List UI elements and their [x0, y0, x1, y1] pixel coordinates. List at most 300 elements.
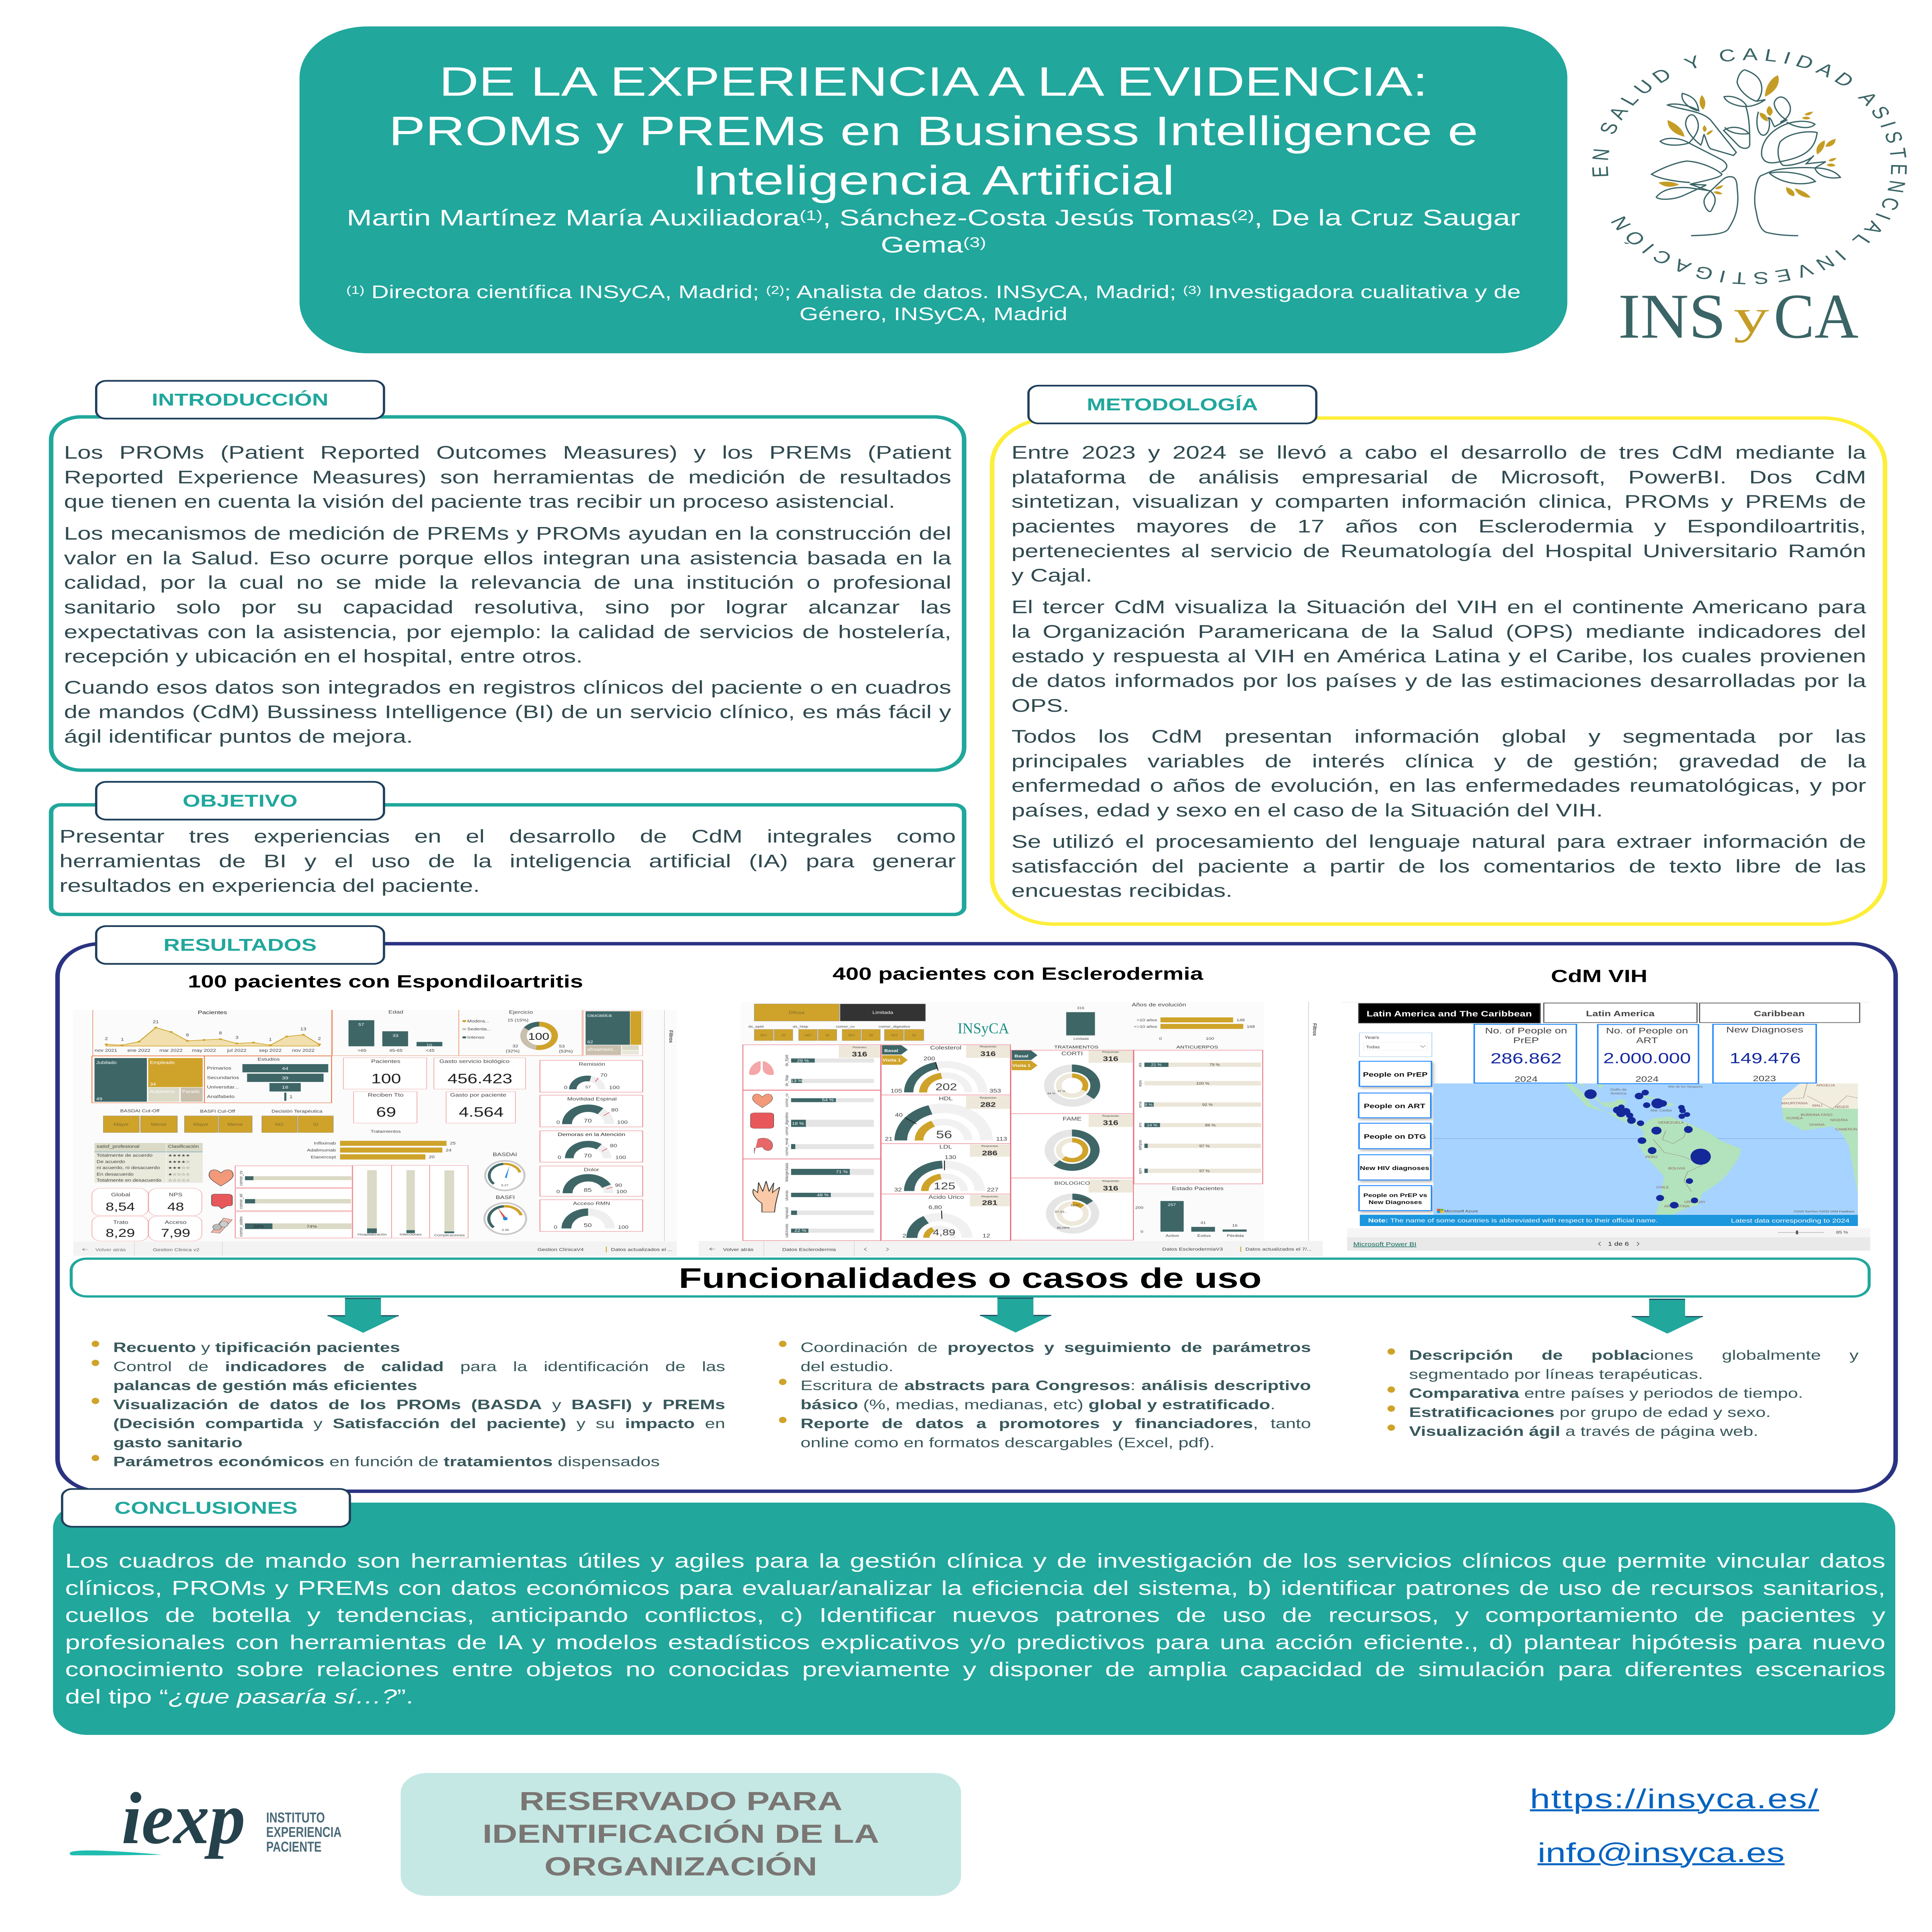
selector buttons [1359, 1061, 1432, 1211]
years slicer [1359, 1033, 1432, 1057]
gauge: remisión: 0 [564, 1085, 568, 1090]
donut: corti: 67 % [1058, 1090, 1066, 1093]
use cases: column 3: Visualización ágil a través de página web. [1409, 1424, 1758, 1439]
subheading: VIH: CdM VIH [1551, 966, 1647, 986]
panel: diagnósticos: 29 % [797, 1058, 809, 1063]
intro paragraph 1 [64, 440, 951, 514]
heading: objetivo: OBJETIVO [183, 791, 298, 810]
gauge: colesterol: 353 [990, 1088, 1001, 1094]
chart: comorbilidades [235, 1166, 352, 1238]
KPI cards: 2024 [1514, 1075, 1537, 1084]
report status bar: Datos actualizados el ... [611, 1247, 672, 1252]
note bar [1360, 1215, 1858, 1226]
gauge: ácido úrico: 4,89 [933, 1228, 955, 1237]
methods paragraph 3 [1012, 724, 1866, 823]
years slicer: Todas [1366, 1044, 1380, 1049]
chart: anticuerpos: 21 % [1151, 1063, 1162, 1067]
chart: estado pacientes: Pérdida [1227, 1234, 1244, 1238]
score cards: Global [111, 1192, 130, 1197]
chart: ejercicio donut: Modera... [467, 1019, 489, 1023]
authors: Martin Martínez María Auxiliadora(1), Sánchez-Costa Jesús Tomas(2), De la Cruz Saugar [347, 205, 1520, 230]
chart: estudios: 16 [282, 1085, 288, 1090]
chart: tratamientos: Tratamientos [371, 1129, 401, 1134]
slicer buttons: Menor [228, 1122, 243, 1127]
gauge: dolor: 85 [584, 1187, 592, 1193]
score cards: Acceso [165, 1219, 187, 1225]
segment buttons: SI [912, 1034, 916, 1037]
chart: comorbilidades: 74% [306, 1224, 317, 1229]
methods paragraph 3: países, edad y sexo en el caso de la Situación del VIH. [1012, 800, 1603, 820]
gauge: demoras [540, 1131, 643, 1172]
map: MAURITANIA [1781, 1102, 1808, 1105]
donut: corti [1011, 1050, 1133, 1114]
gauge: HDL: HDL [939, 1096, 953, 1102]
intro paragraph 3: Cuando esos datos son integrados en registros clínicos del paciente o en cuadros [64, 677, 951, 697]
methods paragraph 1: pertenecientes al servicio de Reumatología del Hospital Universitario Ramón [1012, 541, 1866, 561]
selector buttons: People on ART [1364, 1103, 1425, 1110]
panel: manifestaciones: 71 % [836, 1170, 848, 1174]
report status bar: Gestion Clinica v2 [153, 1247, 199, 1252]
logo wordmark: CA [1774, 281, 1859, 352]
intro paragraph 3 [64, 675, 951, 749]
KPI card labels and values: 100 [371, 1071, 401, 1086]
gauge: HDL: 113 [996, 1136, 1007, 1142]
methods paragraph 2: la Organización Paramericana de la Salud (OPS) mediante indicadores del [1012, 621, 1866, 642]
donut: corti: CORTI [1061, 1051, 1083, 1056]
heading: tratamientos: TRATAMIENTOS [1054, 1044, 1099, 1049]
donut: corti: 64 % [1048, 1092, 1055, 1095]
donut: fame: FAME [1063, 1116, 1082, 1122]
score cards: 8,29 [105, 1227, 135, 1240]
chart: edad: 45-65 [389, 1048, 403, 1053]
gauge: HDL: 56 [936, 1129, 952, 1141]
panel: metodología [990, 416, 1887, 926]
slicer buttons: Mayor [114, 1122, 129, 1127]
report status bar [699, 1241, 1323, 1257]
KPI card labels and values: Gasto servicio biológico [439, 1059, 510, 1064]
map: GUINEA [1786, 1117, 1803, 1120]
chart: eventos: Hospitalización [357, 1233, 387, 1236]
methods paragraph 3: Todos los CdM presentan información global y segmentada por las [1012, 726, 1866, 747]
chart: edad: 10 [426, 1043, 432, 1048]
KPI cards: No. of People on [1606, 1026, 1688, 1036]
KPI card labels and values: 456.423 [447, 1071, 512, 1086]
chart: estudios: Universitar... [207, 1085, 239, 1089]
panel: manifestaciones: raynaud [785, 1208, 789, 1219]
chart: edad: >65 [358, 1048, 367, 1053]
gauge: demoras: 70 [584, 1153, 592, 1159]
reserved box: RESERVADO PARA [519, 1787, 842, 1816]
chart: pacientes line: 21 [153, 1020, 159, 1024]
gauge: ácido úrico: Acido Urico [929, 1195, 964, 1200]
table: satisfacción: ★★★★☆ [168, 1160, 190, 1164]
chart: ejercicio donut: 100 [528, 1032, 549, 1042]
chart: comorbilidades: 26% [253, 1224, 264, 1229]
chart: años de evolución: 148 [1236, 1018, 1245, 1022]
donut: biologico: 316 [1103, 1185, 1118, 1192]
chart: estudios: Estudios [258, 1057, 280, 1061]
KPI cards: 2.000.000 [1603, 1050, 1691, 1066]
segment buttons: dx_htap [793, 1025, 808, 1029]
map: ARGENTINA [1664, 1205, 1690, 1208]
table: satisfacción: ★☆☆☆☆ [168, 1173, 190, 1177]
chart: anticuerpos: ANTICUERPOS [1176, 1044, 1218, 1049]
chart: tratamientos: Etanercept [311, 1155, 336, 1160]
tree [1651, 70, 1840, 236]
panel: manifestaciones: calcinosis [785, 1224, 789, 1238]
text: introducción [64, 440, 951, 753]
arrow: column 2 [980, 1298, 1051, 1333]
donut: corti: Respuestas [1102, 1051, 1119, 1053]
chart: edad: <45 [426, 1048, 435, 1053]
methods paragraph 2 [1012, 595, 1866, 718]
gauge: colesterol: 316 [980, 1050, 996, 1058]
map: CHILE [1656, 1186, 1669, 1189]
region tabs: Latin America [1586, 1009, 1655, 1018]
chart: años de evolución: 0 [1159, 1037, 1162, 1041]
KPI card labels and values: Reciben Tto [368, 1092, 403, 1098]
report status bar: Gestion ClínicaV4 [537, 1247, 584, 1252]
gauge: ácido úrico: Respuestas [981, 1195, 998, 1198]
methods paragraph 3: enfermedad o años de evolución, en las enfermedades reumatológicas, y por [1012, 776, 1866, 796]
chart: ejercicio donut [459, 1010, 582, 1056]
icon: intestine [212, 1194, 232, 1209]
panel: comorbilidades: comor_cv [785, 1094, 789, 1107]
gauge: HDL: 282 [980, 1101, 996, 1109]
chart: anticuerpos: 14 % [1147, 1123, 1158, 1127]
chart: anticuerpos: arpa [1138, 1080, 1143, 1087]
segment buttons: SI [869, 1034, 873, 1037]
treemap: etnia: 62 [587, 1040, 593, 1044]
heading: introducción [95, 380, 385, 420]
chart: eventos: Complicaciones [434, 1234, 465, 1237]
slicer buttons: BASFI Cut-Off [200, 1109, 235, 1114]
gauge: dolor [540, 1166, 643, 1209]
chart: estado pacientes: 16 [1232, 1224, 1238, 1228]
intro paragraph 2: expectativas con la asistencia, por ejemplo: la calidad de servicios de hostelería, [64, 622, 951, 642]
subheading: esclerodermia: 400 pacientes con Esclerodermia [833, 964, 1203, 984]
segment buttons [748, 1004, 925, 1041]
chart: anticuerpos: 86 % [1205, 1123, 1216, 1127]
intro paragraph 3: ágil identificar puntos de mejora. [64, 726, 413, 747]
gauge: remisión: Remisión [579, 1062, 605, 1067]
map: VENEZUELA [1658, 1121, 1684, 1125]
gauge: BASDAI: 5.27 [501, 1184, 509, 1187]
methods paragraph 2: de datos informados por los países y de las estimaciones desarrolladas por la [1012, 670, 1866, 691]
score cards: NPS [169, 1192, 182, 1197]
KPI cards: 2024 [1636, 1075, 1659, 1084]
map: Mar Caribe [1650, 1109, 1672, 1112]
donut: biologico: Respuestas [1102, 1180, 1119, 1182]
heading: resultados [95, 925, 385, 965]
treemap: situación laboral: Parado [182, 1089, 200, 1094]
panel: manifestaciones [743, 1159, 881, 1241]
slicer buttons [104, 1109, 333, 1133]
methods paragraph 4 [1012, 829, 1866, 903]
gauge: dolor: 90 [615, 1183, 622, 1188]
use cases: column 3: Comparativa entre países y periodos de tiempo. [1409, 1386, 1803, 1401]
use cases: column 1: gasto sanitario [113, 1435, 243, 1450]
chart: pacientes line: nov 2021 [95, 1048, 117, 1053]
intro paragraph 1: Reported Experience Measures) son herramientas de medición de resultados [64, 467, 951, 487]
gauge: demoras: 100 [616, 1155, 626, 1160]
use cases: column 1: Parámetros económicos en función de tratamientos dispensados [113, 1454, 660, 1469]
segment buttons: NO [760, 1034, 767, 1037]
chart: estudios [204, 1056, 332, 1103]
KPI cards: ART [1636, 1036, 1658, 1045]
text: metodología [1012, 440, 1866, 903]
gauge: LDL: 32 [894, 1187, 902, 1193]
chart: anticuerpos: 8 % [1145, 1103, 1153, 1107]
chart: pacientes line: Pacientes [198, 1010, 227, 1015]
methods paragraph 1: sintetizan, visualizan y comparten información clinica, PROMs y PREMs de [1012, 492, 1866, 512]
logo ring text: EN SALUD Y CALIDAD ASISTENCIAL INVESTIGACIÓN [1588, 45, 1912, 288]
intro paragraph 3: de mandos (CdM) Bussiness Intelligence (BI) de un servicio clínico, es más fácil y [64, 702, 951, 722]
chart: tratamientos [307, 1129, 456, 1160]
slicer buttons: NO [275, 1122, 284, 1127]
chart: estudios: Secundarios [207, 1075, 239, 1080]
donut: fame: Respuestas [1102, 1114, 1119, 1117]
slicer buttons: Menor [151, 1122, 167, 1127]
chart: ejercicio donut: 53 [559, 1044, 565, 1049]
chart: años de evolución: 168 [1247, 1025, 1255, 1029]
KPI card labels and values: 4.564 [459, 1105, 503, 1120]
gauge: remisión: 57 [585, 1085, 591, 1089]
power BI footer: 85 % [1836, 1230, 1848, 1235]
treemap: situación laboral [92, 1056, 204, 1103]
authors: Gema(3) [881, 232, 986, 257]
chart: anticuerpos: 92 % [1202, 1103, 1213, 1107]
icon: joint [211, 1218, 232, 1233]
gauge: acceso RMN: 50 [584, 1222, 592, 1228]
chart: estado pacientes [1135, 1186, 1247, 1238]
filters side bar: Filtros [1312, 1023, 1318, 1036]
chart: pacientes line: 8 [219, 1031, 222, 1035]
treemap: situación laboral: 49 [96, 1097, 102, 1101]
panel: conclusiones [53, 1503, 1895, 1735]
donut: corti: 36 % [1088, 1078, 1096, 1081]
donut: biologico: 12,97... [1070, 1204, 1083, 1207]
methods paragraph 1 [1012, 440, 1866, 588]
chart: limitada bar [1066, 1007, 1095, 1041]
funcionalidades banner: Funcionalidades o casos de uso [679, 1262, 1262, 1294]
chart: pacientes line: 2 [105, 1036, 108, 1041]
report status bar [73, 1242, 677, 1256]
main title [299, 57, 1567, 205]
donut: fame [1011, 1114, 1133, 1178]
map: Microsoft Azure [1444, 1209, 1478, 1213]
intro paragraph 2: Los mecanismos de medición de PREMs y PROMs ayudan en la construcción del [64, 523, 951, 544]
table: satisfacción: En desacuerdo [97, 1172, 134, 1177]
gauge: ácido úrico: 281 [982, 1199, 998, 1207]
text: conclusiones: Los cuadros de mando son herramientas útiles y agiles para la gestión clínica y de investigación de los servicios clínicos que permite vincular datos [65, 1550, 1885, 1572]
gauge: ácido úrico [881, 1194, 1010, 1259]
KPI cards [344, 1058, 526, 1123]
dashboard: esclerodermia [682, 937, 1344, 1278]
segment buttons: comor_cv [836, 1025, 855, 1029]
gauge: ácido úrico: 6,80 [929, 1205, 942, 1210]
power BI footer [1347, 1228, 1870, 1250]
chart: edad: Edad [388, 1010, 403, 1015]
map: CAMERÚN [1835, 1128, 1857, 1131]
chart: años de evolución: Años de evolución [1132, 1002, 1186, 1008]
donut: biologico: 86,08% [1057, 1226, 1070, 1230]
chart: pacientes line: 3 [235, 1035, 238, 1040]
arrow: column 1 [327, 1298, 399, 1333]
intro paragraph 2: calidad, por la cual no se mide la relevancia de una institución o profesional [64, 572, 951, 593]
chart: pacientes line: sep 2022 [259, 1048, 282, 1053]
map: ©2025 TomTom ©2025 OSM Feedback [1794, 1210, 1854, 1213]
panel: introducción [49, 415, 966, 772]
treemap: situación laboral: Autónomo [150, 1089, 175, 1094]
gauge: BASDAI: BASDAI [493, 1152, 517, 1157]
table: satisfacción: satisf_profesional [97, 1144, 139, 1149]
chart: comorbilidades: comor_eii [238, 1194, 244, 1209]
panel: comorbilidades: 54 % [822, 1098, 834, 1102]
chart: pacientes line: nov 2022 [292, 1048, 315, 1053]
KPI cards: 2023 [1753, 1074, 1776, 1083]
chart: estudios: 44 [282, 1066, 288, 1071]
gauge: HDL: Respuestas [980, 1096, 997, 1099]
filters side bar: Filtros [668, 1030, 674, 1043]
chart: tratamientos: 20 [429, 1155, 435, 1159]
dashboard: espondiloartritis [38, 937, 701, 1278]
donut: corti: Visita 1 [1012, 1063, 1031, 1068]
treemap: situación laboral: Empleado [150, 1060, 175, 1065]
use cases: column 1: Recuento y tipificación pacientes [113, 1340, 400, 1355]
chart: estado pacientes: Activo [1166, 1234, 1179, 1238]
map: Golfo de [1610, 1088, 1627, 1092]
gauge: movilidad espinal: 0 [556, 1120, 560, 1125]
heading: introducción: INTRODUCCIÓN [152, 390, 328, 409]
selector buttons: People on PrEP [1363, 1071, 1428, 1078]
chart: anticuerpos: apm [1138, 1168, 1143, 1174]
text: objetivo: resultados en experiencia del paciente. [60, 875, 480, 896]
KPI cards: 149.476 [1730, 1050, 1801, 1066]
gauge: LDL: 125 [934, 1181, 955, 1192]
chart: ejercicio donut: 15 (15%) [507, 1018, 529, 1022]
chart: años de evolución: >10 años [1137, 1018, 1157, 1022]
use cases: column 2: del estudio. [801, 1359, 893, 1374]
gauge: HDL: 40 [895, 1112, 903, 1118]
segment buttons: NO [848, 1034, 855, 1037]
intro paragraph 2: valor en la Salud. Eso ocurre porque ellos integran una asistencia basada en la [64, 548, 951, 568]
methods paragraph 1: Entre 2023 y 2024 se llevó a cabo el desarrollo de tres CdM mediante la [1012, 442, 1866, 463]
main title: PROMs y PREMs en Business Intelligence e [389, 108, 1478, 154]
chart: pacientes line: 13 [300, 1027, 306, 1031]
gauge: acceso RMN: Acceso RMN [573, 1201, 610, 1206]
gauge: LDL: LDL [939, 1145, 952, 1150]
years slicer: Years [1364, 1035, 1379, 1040]
text: conclusiones: clínicos, PROMs y PREMs con datos económicos para evaluar/analizar la eficiencia del sistema, b) identificar patrones de uso de recursos sanitarios, [65, 1577, 1885, 1599]
heading: conclusiones [61, 1488, 351, 1527]
chart: anticuerpos: ama [1138, 1101, 1143, 1108]
slicer buttons: Decisión Terapéutica [272, 1109, 322, 1114]
chart: estado pacientes: 0 [1141, 1230, 1143, 1234]
use cases: column 2: Escritura de abstracts para Congresos: análisis descriptivo [801, 1378, 1311, 1393]
gauge: colesterol: Colesterol [930, 1045, 961, 1051]
link: website: https://insyca.es/ [1530, 1784, 1819, 1814]
dashboard: esclerodermia: INSyCA [957, 1020, 1009, 1037]
gauge: acceso RMN: 0 [554, 1225, 557, 1230]
chart: edad [332, 1010, 459, 1056]
affiliations: (1) Directora científica INSyCA, Madrid; (2); Analista de datos. INSyCA, Madrid; (3) Investigadora cualitativa y de [346, 282, 1520, 302]
report status bar: Volver atrás [95, 1247, 126, 1252]
gauge: movilidad espinal [540, 1095, 643, 1140]
gauge: remisión: 70 [600, 1073, 607, 1078]
logo wordmark [1618, 281, 1859, 352]
text: conclusiones: conocimiento sobre relaciones entre objetos no conocidas previamente y disponer de amplia capacidad de simulación para diferentes escenarios [65, 1658, 1885, 1681]
chart: pacientes line: ene 2022 [128, 1048, 150, 1053]
title panel [299, 26, 1567, 353]
KPI card labels and values: Gasto por paciente [450, 1092, 506, 1098]
intro paragraph 1: que tienen en cuenta la visión del paciente tras recibir un proceso asistencial. [64, 492, 895, 512]
report status bar: Datos actualizados el 7/... [1245, 1247, 1311, 1252]
text: conclusiones: cuellos de botella y tendencias, anticipando conflictos, c) Identificar nuevos patrones de uso de recursos, y comportamiento de pacientes y [65, 1604, 1885, 1626]
map: BOLIVIA [1668, 1167, 1685, 1170]
map: PERÚ [1645, 1155, 1657, 1159]
gauge: movilidad espinal: 100 [617, 1120, 628, 1125]
gauge: remisión: 100 [609, 1085, 620, 1090]
chart: pacientes line: mar 2022 [159, 1048, 183, 1053]
gauge: HDL [881, 1095, 1010, 1173]
funcionalidades banner [70, 1257, 1871, 1298]
logo: iexp instituto experiencia paciente [65, 1789, 352, 1871]
map: Mar de los Sargazos [1668, 1085, 1703, 1088]
chart: estado pacientes: 257 [1168, 1203, 1176, 1207]
gauge: LDL [881, 1144, 1010, 1218]
region tabs: Caribbean [1754, 1009, 1805, 1018]
chart: estado pacientes: 200 [1135, 1206, 1143, 1210]
score cards: 8,54 [105, 1201, 135, 1213]
table: satisfacción: ★★★★★ [168, 1154, 190, 1158]
selector buttons: New HIV diagnoses [1360, 1165, 1429, 1171]
segment buttons: dx_epid [748, 1025, 764, 1029]
table: satisfacción [95, 1143, 203, 1183]
note bar: Note: The name of some countries is abbreviated with respect to their official name. [1368, 1217, 1658, 1224]
use cases: column 3: Descripción de poblaciones globalmente y [1409, 1348, 1859, 1363]
gauge: colesterol: Basal [884, 1048, 898, 1053]
chart: pacientes line: 6 [186, 1033, 189, 1037]
main title: DE LA EXPERIENCIA A LA EVIDENCIA: [439, 58, 1428, 104]
methods paragraph 4: satisfacción del paciente a partir de los comentarios de texto libre de las [1012, 856, 1866, 876]
chart: estado pacientes: Estado Pacientes [1172, 1186, 1224, 1192]
chart: pacientes line: jul 2022 [227, 1048, 247, 1053]
chart: estudios: Analfabeto [207, 1094, 235, 1099]
selector buttons: People on PrEP vs [1363, 1192, 1427, 1199]
use cases: column 2: Reporte de datos a promotores y financiadores, tanto [801, 1416, 1311, 1431]
text: conclusiones [65, 1548, 1885, 1710]
methods paragraph 2: OPS. [1012, 695, 1069, 716]
gauge: BASDAI [483, 1152, 527, 1192]
gauge: dolor: 100 [616, 1189, 627, 1194]
logo wordmark: y [1733, 289, 1769, 343]
chart: ejercicio donut: (32%) [506, 1049, 520, 1053]
chart: ejercicio donut: Ejercicio [509, 1010, 533, 1015]
gauge: LDL: 286 [982, 1150, 998, 1157]
heading: objetivo [95, 781, 385, 820]
slicer buttons: SI [313, 1122, 318, 1127]
authors [299, 204, 1567, 258]
KPI cards [1474, 1024, 1816, 1084]
slicer buttons: Mayor [193, 1122, 209, 1127]
chart: tratamientos: 24 [446, 1148, 452, 1153]
panel: diagnósticos: dx_Epid [785, 1055, 789, 1066]
text: objetivo: herramientas de BI y el uso de la inteligencia artificial (IA) para generar [60, 851, 956, 871]
chart: edad: 57 [358, 1022, 364, 1027]
table: satisfacción: Totalmente de acuerdo [97, 1153, 153, 1158]
use cases: column 3: segmentado por líneas terapéuticas. [1409, 1367, 1703, 1382]
